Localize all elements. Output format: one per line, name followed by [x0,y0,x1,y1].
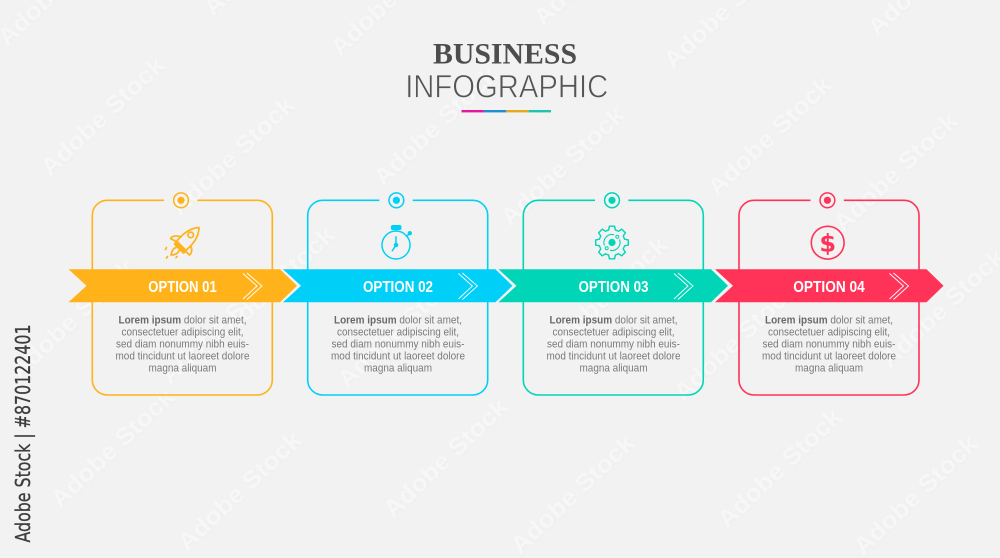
icon: stopwatch [382,226,411,259]
heading: infographic: INFOGRAPHIC [405,69,608,105]
text block [331,315,465,375]
panel: option 02 [283,193,512,395]
panel: option 04 [715,193,944,395]
text block: Lorem ipsum dolor sit amet, [118,315,246,327]
text block: sed diam nonummy nibh euis- [116,339,249,351]
card outline [308,200,488,395]
option label: OPTION 04 [793,279,865,296]
text block [762,315,896,375]
text block: sed diam nonummy nibh euis- [332,339,465,351]
chevrons [890,273,908,300]
marker dot [605,193,619,208]
marker dot [820,193,835,208]
stock watermark pattern: Adobe Stock [669,276,804,406]
chevrons [674,273,693,300]
card outline [523,200,703,395]
vertical stock credit: Adobe Stock | #870122401 [11,324,35,542]
text block: mod tincidunt ut laoreet dolore [762,351,896,363]
arrow banner [715,269,944,302]
panel: option 03 [498,193,728,395]
icon: rocket [166,228,199,258]
colored title underline [462,110,551,112]
heading: business: BUSINESS [433,37,577,70]
text block: magna aliquam [580,363,648,375]
stock watermark pattern: Adobe Stock [829,107,964,237]
text block [546,315,680,375]
text block: sed diam nonummy nibh euis- [547,339,680,351]
option label: OPTION 02 [363,279,433,296]
option label: OPTION 01 [148,279,217,296]
text block: consectetuer adipiscing elit, [768,327,890,339]
arrow banner [68,269,297,302]
text block: magna aliquam [148,363,216,375]
panel: option 01 [68,193,297,395]
text block: Lorem ipsum dolor sit amet, [765,315,893,327]
chevrons [458,273,477,300]
text block: mod tincidunt ut laoreet dolore [331,351,465,363]
stock watermark pattern: Adobe Stock [46,383,181,513]
text block: consectetuer adipiscing elit, [552,327,674,339]
text block: mod tincidunt ut laoreet dolore [116,351,250,363]
stock watermark pattern: Adobe Stock [369,61,504,191]
text block: consectetuer adipiscing elit, [122,327,244,339]
stock watermark pattern: Adobe Stock [713,403,848,533]
stock watermark pattern: Adobe Stock [173,426,308,556]
icon: dollar coin: $ [819,230,836,258]
stock watermark pattern: Adobe Stock [156,259,291,389]
card outline [92,200,272,395]
stock watermark pattern: Adobe Stock [206,221,341,351]
stock watermark pattern: Adobe Stock [166,91,301,221]
marker dot [174,193,188,208]
text block: sed diam nonummy nibh euis- [762,339,896,351]
option label: OPTION 03 [578,279,649,296]
text block: magna aliquam [795,363,863,375]
stock watermark pattern: Adobe Stock [703,71,838,201]
chevrons [243,273,262,300]
card outline [739,200,919,395]
stock watermark pattern: Adobe Stock [333,263,468,393]
icon: dollar coin [811,226,844,259]
stock watermark pattern: Adobe Stock [539,231,674,361]
stock watermark pattern: Adobe Stock [36,51,171,181]
stock watermark pattern: Adobe Stock [849,430,984,558]
text block: consectetuer adipiscing elit, [337,327,459,339]
text block [116,315,250,375]
text block: Lorem ipsum dolor sit amet, [334,315,462,327]
text block: Lorem ipsum dolor sit amet, [550,315,678,327]
stock watermark pattern: Adobe Stock [496,101,631,231]
arrow banner [283,269,512,302]
stock watermark pattern: Adobe Stock [876,243,1000,373]
stock watermark pattern: Adobe Stock [379,393,514,523]
marker dot [389,193,404,208]
title [405,37,608,112]
text block: mod tincidunt ut laoreet dolore [546,351,680,363]
icon: gear [596,226,628,259]
stock watermark pattern: Adobe Stock [6,254,141,384]
arrow banner [498,269,728,302]
stock watermark pattern: Adobe Stock [506,429,641,558]
text block: magna aliquam [364,363,432,375]
